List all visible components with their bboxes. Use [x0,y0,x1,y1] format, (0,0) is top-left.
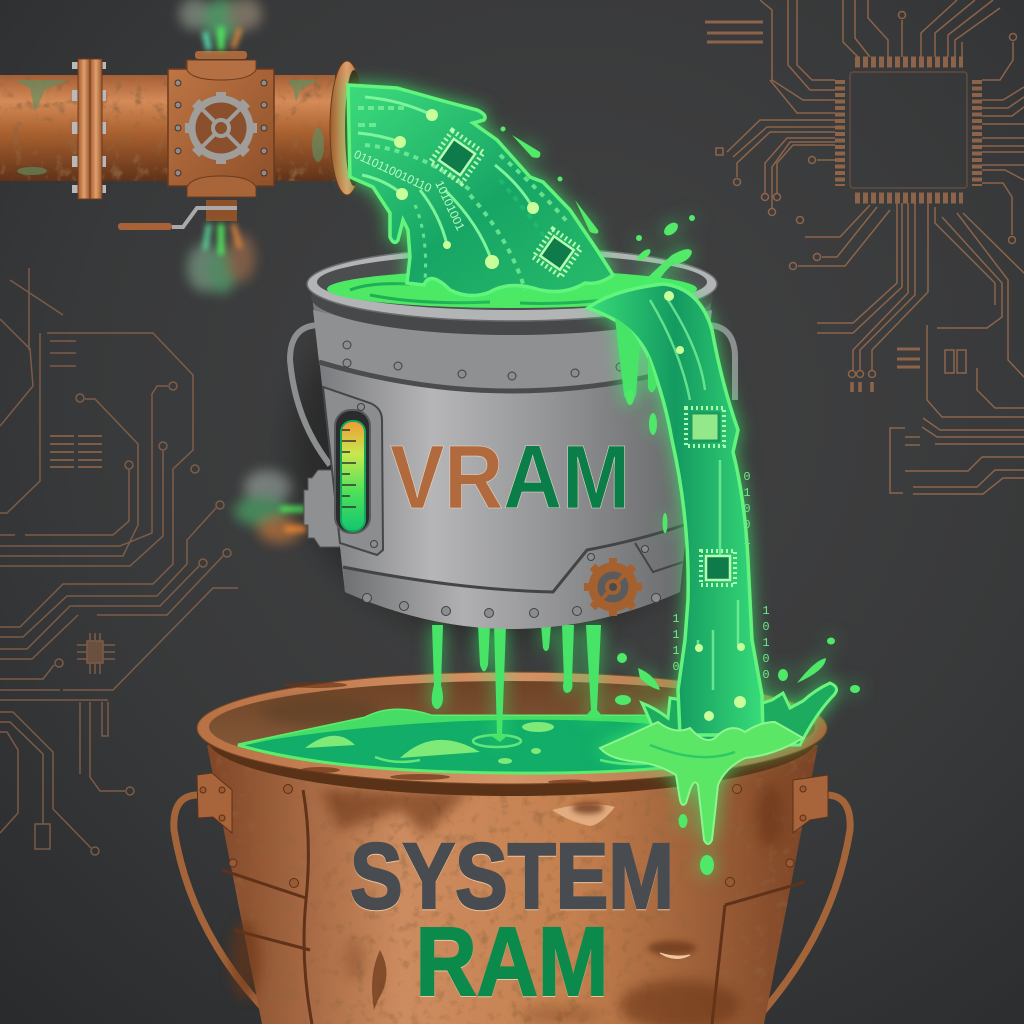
chip [431,131,483,183]
data lines [650,300,738,690]
pipe flange [78,59,90,199]
icon: rust gear [584,558,642,616]
verdigris patches [15,80,324,175]
label: system: SYSTEM [350,824,674,928]
slime stream over bucket edge [588,284,837,844]
rust blotches [230,783,784,1024]
rim [197,672,827,784]
icon: steel gear [185,92,257,164]
handles [290,325,330,465]
chip [686,408,724,446]
upper band [313,310,712,391]
body seams and patches [222,790,805,1024]
pipe mouth ring [330,61,364,195]
rim underside [311,259,713,335]
brackets [197,773,232,833]
valve lever [172,208,237,227]
steam jets: bottom [205,224,240,255]
comet tails [358,97,533,262]
data dashes [358,108,570,290]
bucket body [207,745,818,1024]
gauge panel [323,387,383,555]
steam jets: side nozzle [280,509,306,529]
bucket handles [174,795,265,1010]
flange bolts [72,62,106,193]
side nozzle [304,470,340,547]
pool blobs [305,722,554,764]
left drip [615,318,640,402]
crown back [642,683,837,745]
binary text: stream right lower: 10100 [759,604,773,684]
rim rust [283,682,592,784]
rim lower shadow [207,680,817,796]
bucket body [312,295,712,629]
slime stream from pipe: 10101001 [432,178,468,233]
highlights [664,291,746,721]
slime surface [327,270,697,308]
label: ram: RAM [416,907,608,1016]
binary text: 0110110010110 [352,147,434,195]
circuit traces: top right with chip [705,0,1024,494]
main stream [588,284,763,735]
steam: side nozzle [234,470,302,543]
rivets [343,341,660,618]
pipe body [0,75,335,181]
steam jets: top [205,27,240,50]
steam: top [179,0,262,42]
binary text: stream left: 1110 [669,612,683,676]
lower band [343,525,684,629]
pool swirls [375,725,690,764]
drips: between buckets [432,625,604,742]
binary text: stream right upper: 01001 [740,470,754,550]
valve box [168,69,274,186]
slime stream from pipe [348,85,613,296]
chip [533,229,581,277]
gauge [335,410,370,533]
steam: bottom [187,234,255,294]
splash above rim [500,126,695,290]
vram bucket [290,247,735,629]
system ram bucket [174,672,850,1024]
rivets [200,784,806,888]
valve caps [186,60,256,82]
dents [372,802,696,1010]
slime pool [238,710,782,773]
nodes [394,109,539,269]
copper pipe [0,51,364,230]
front splash and drips [600,722,803,844]
rim [307,247,717,321]
splash droplets [615,389,860,875]
circuit traces: left side with chip [0,268,238,855]
chip [701,551,735,585]
shadow behind vram bucket [292,260,732,640]
valve rivets [175,80,267,176]
label: vram: VRAM [390,428,630,528]
